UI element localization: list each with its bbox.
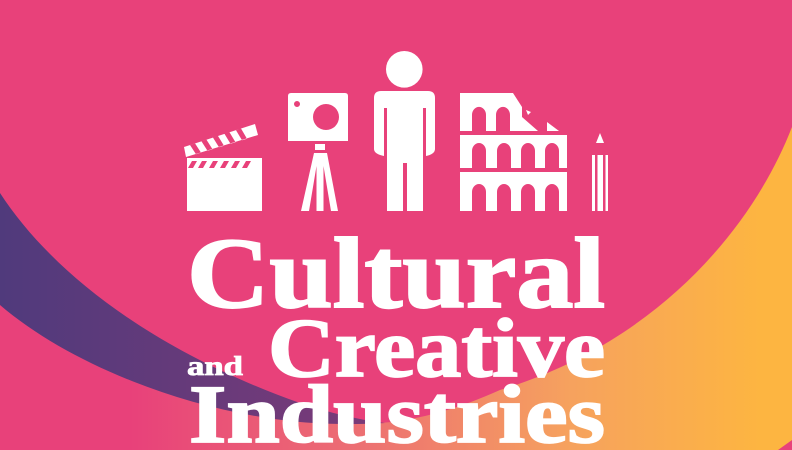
icon: colosseum <box>460 93 567 211</box>
title line: Cultural: Cultural <box>187 217 605 329</box>
icon: film clapperboard <box>184 124 262 211</box>
background: purple curved band <box>0 193 385 424</box>
icon: standing person <box>374 51 435 211</box>
background: lower warm gradient swoosh <box>0 127 792 450</box>
title word: and: and <box>187 351 243 381</box>
icon: camera on tripod <box>288 93 348 211</box>
icon: pencil <box>592 133 608 211</box>
title <box>187 217 605 450</box>
title line: Creative: Creative <box>268 302 605 395</box>
